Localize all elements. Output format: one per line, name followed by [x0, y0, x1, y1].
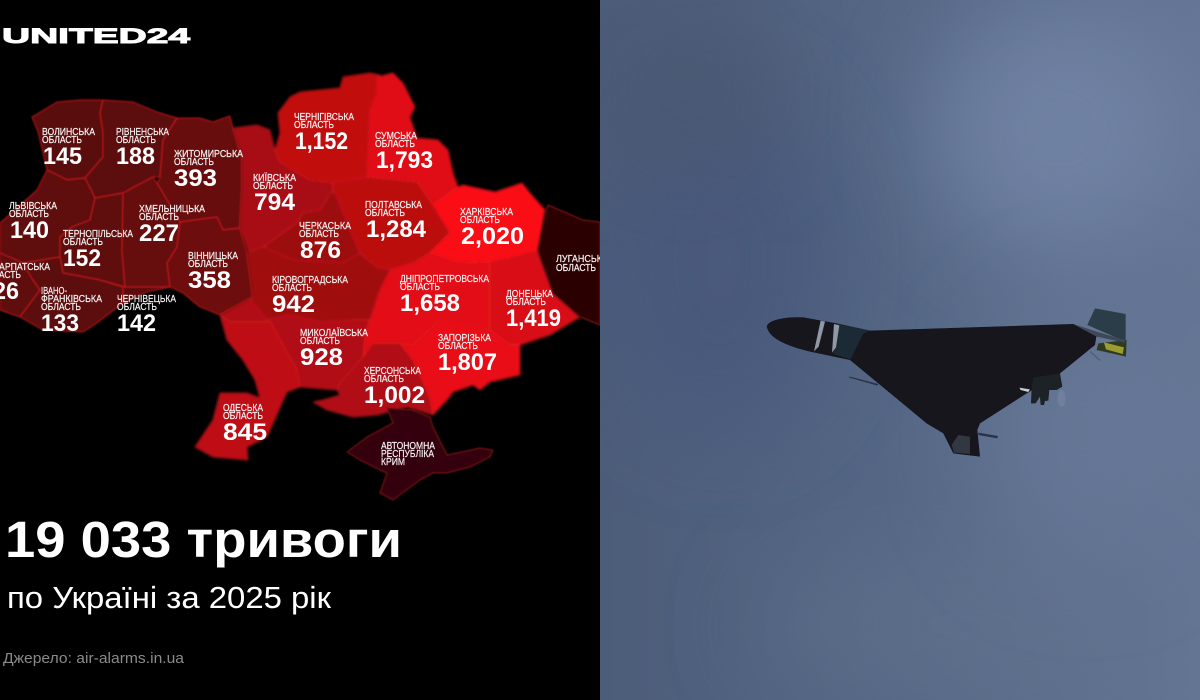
label: Chernihiv: ЧЕРНІГІВСЬКА — [294, 112, 354, 123]
label: Kyiv — [253, 172, 296, 210]
label: Poltava: 1,284 — [366, 216, 427, 243]
label: Mykolaiv — [300, 327, 368, 371]
label: Kharkiv: ОБЛАСТЬ — [460, 215, 500, 226]
label: Odesa: 845 — [223, 419, 267, 446]
subheading: period: по Україні за 2025 рік — [7, 580, 331, 615]
label: Kherson: ОБЛАСТЬ — [364, 374, 404, 385]
label: Ivano-Frankivsk: ІВАНО- — [41, 286, 67, 297]
label: Lviv: ОБЛАСТЬ — [9, 209, 49, 220]
label: Vinnytsia: ВІННИЦЬКА — [188, 251, 238, 262]
label: Crimea: АВТОНОМНА — [381, 441, 435, 452]
region: Chernivtsi — [123, 287, 170, 303]
region: Mykolaiv — [220, 297, 370, 390]
label: Ivano-Frankivsk: 133 — [41, 310, 79, 337]
label: Sumy: ОБЛАСТЬ — [375, 139, 415, 150]
label: Khmelnytskyi: 227 — [139, 220, 179, 247]
region: Kherson — [313, 343, 433, 417]
label: Cherkasy: 876 — [300, 237, 341, 264]
region: Donetsk — [490, 250, 580, 345]
region: Crimea — [347, 408, 493, 500]
region: Zhytomyr — [157, 116, 242, 230]
label: Kyiv: ОБЛАСТЬ — [253, 181, 293, 192]
label: Ternopil: 152 — [63, 245, 101, 272]
label: Mykolaiv: МИКОЛАЇВСЬКА — [300, 327, 368, 339]
label: Zaporizhzhia — [438, 333, 497, 376]
label: Khmelnytskyi: ОБЛАСТЬ — [139, 212, 179, 223]
label: Ivano-Frankivsk — [41, 286, 102, 331]
label: Rivne: 188 — [116, 143, 155, 170]
label: Zhytomyr — [174, 150, 244, 186]
label: Donetsk: ОБЛАСТЬ — [506, 297, 546, 308]
label: Chernihiv: 1,152 — [295, 128, 348, 155]
label: Ivano-Frankivsk: ОБЛАСТЬ — [41, 302, 81, 313]
region: Ternopil — [60, 193, 125, 287]
label: Odesa: ОБЛАСТЬ — [223, 411, 263, 422]
heading: total alarms: 19 033 тривоги — [5, 511, 402, 568]
label: Cherkasy: ЧЕРКАСЬКА — [299, 221, 351, 232]
label: Crimea — [381, 441, 435, 468]
label: Dnipropetrovsk — [400, 274, 489, 317]
label: Ivano-Frankivsk: ФРАНКІВСЬКА — [41, 294, 102, 305]
label: Donetsk: 1,419 — [506, 305, 561, 332]
region: Luhansk — [538, 205, 600, 325]
label: Volyn: 145 — [43, 143, 82, 170]
label: Chernivtsi: 142 — [117, 310, 156, 337]
label: Kherson — [364, 366, 425, 409]
label: Kharkiv: ХАРКІВСЬКА — [460, 207, 513, 218]
region: Cherkasy — [263, 190, 360, 263]
region: Kirovohrad — [247, 247, 390, 322]
label: Ternopil: ОБЛАСТЬ — [63, 237, 103, 248]
label: Volyn — [42, 128, 96, 164]
source note: Джерело: air-alarms.in.ua — [3, 651, 185, 667]
label: Donetsk: ДОНЕЦЬКА — [506, 289, 553, 300]
label: Rivne: РІВНЕНСЬКА — [116, 127, 169, 138]
region: Chernihiv — [275, 73, 380, 183]
icon: drone — [767, 308, 1127, 457]
label: Rivne: ОБЛАСТЬ — [116, 135, 156, 146]
label: Cherkasy: ОБЛАСТЬ — [299, 229, 339, 240]
label: Poltava: ОБЛАСТЬ — [365, 208, 405, 219]
region: Poltava — [333, 177, 450, 270]
label: Zhytomyr: ЖИТОМИРСЬКА — [174, 149, 243, 160]
label: Luhansk: ЛУГАНСЬКА — [556, 254, 608, 265]
label: Ternopil — [63, 230, 133, 266]
label: Kyiv: 794 — [254, 189, 296, 216]
panel: photo of drone in sky — [600, 0, 1200, 700]
region: Volyn — [32, 100, 103, 180]
map of Ukraine: central and eastern regions — [195, 73, 580, 460]
label: Zakarpattia — [0, 262, 50, 299]
label: Donetsk — [506, 289, 561, 332]
label: Kharkiv — [460, 207, 524, 250]
label: Sumy — [375, 131, 433, 174]
label: Chernihiv: ОБЛАСТЬ — [294, 120, 334, 131]
logo: UNITED24: UNITED24 — [2, 25, 191, 48]
label: Lviv: 140 — [10, 217, 49, 244]
label: Crimea: РЕСПУБЛІКА — [381, 449, 434, 460]
label: Crimea: КРИМ — [381, 457, 405, 468]
label: Kirovohrad: ОБЛАСТЬ — [272, 283, 312, 294]
region: Sumy — [367, 73, 458, 205]
label: Zhytomyr: ОБЛАСТЬ — [174, 157, 214, 168]
label: Chernivtsi: ОБЛАСТЬ — [117, 302, 157, 313]
label: Volyn: ОБЛАСТЬ — [42, 135, 82, 146]
label: Kherson: 1,002 — [364, 382, 425, 409]
label: Chernivtsi: ЧЕРНІВЕЦЬКА — [117, 294, 176, 305]
label: Odesa: ОДЕСЬКА — [223, 403, 263, 414]
region: Odesa — [195, 315, 300, 460]
label: Zhytomyr: 393 — [174, 165, 217, 192]
label: Dnipropetrovsk: ОБЛАСТЬ — [400, 282, 440, 293]
label: Cherkasy — [299, 221, 351, 264]
label: Khmelnytskyi: ХМЕЛЬНИЦЬКА — [139, 204, 205, 215]
label: Kirovohrad: КІРОВОГРАДСЬКА — [272, 275, 348, 286]
region: Lviv — [0, 170, 95, 263]
panel: alarm map — [0, 28, 600, 666]
map of Ukraine: occupied regions — [347, 205, 600, 500]
label: Khmelnytskyi — [139, 204, 205, 241]
label: Lviv — [8, 202, 58, 238]
region: Kharkiv — [430, 183, 545, 263]
label: Odesa — [223, 403, 267, 446]
region: Zakarpattia — [0, 253, 40, 317]
label: Sumy: 1,793 — [376, 147, 433, 174]
label: Chernihiv — [294, 112, 354, 155]
label: Kherson: ХЕРСОНСЬКА — [364, 366, 421, 377]
label: Poltava — [365, 200, 427, 243]
region: Kyiv — [233, 125, 333, 252]
label: Mykolaiv: ОБЛАСТЬ — [300, 336, 340, 347]
label: Zaporizhzhia: ЗАПОРІЗЬКА — [438, 333, 491, 344]
map of Ukraine: western regions — [0, 100, 253, 332]
label: Kirovohrad — [272, 275, 348, 318]
region: Vinnytsia — [167, 217, 253, 315]
label: Poltava: ПОЛТАВСЬКА — [365, 200, 422, 211]
label: Kirovohrad: 942 — [272, 291, 315, 318]
label: Luhansk — [556, 254, 608, 274]
label: Rivne — [116, 128, 169, 164]
region: Ivano-Frankivsk — [20, 257, 123, 332]
label: Chernivtsi — [117, 294, 176, 337]
region: Zaporizhzhia — [400, 320, 520, 415]
region: Rivne — [85, 100, 177, 198]
label: Lviv: ЛЬВІВСЬКА — [9, 201, 57, 212]
label: Ternopil: ТЕРНОПІЛЬСЬКА — [63, 229, 133, 240]
region: Dnipropetrovsk — [363, 253, 490, 357]
label: Zaporizhzhia: 1,807 — [438, 349, 497, 376]
label: Vinnytsia: 358 — [188, 267, 231, 294]
label: Vinnytsia — [188, 252, 238, 288]
label: Sumy: СУМСЬКА — [375, 131, 417, 142]
label: Kyiv: КИЇВСЬКА — [253, 172, 296, 184]
label: Zaporizhzhia: ОБЛАСТЬ — [438, 341, 478, 352]
label: Luhansk: ОБЛАСТЬ — [556, 263, 596, 274]
label: Dnipropetrovsk: ДНІПРОПЕТРОВСЬКА — [400, 274, 489, 285]
label: Dnipropetrovsk: 1,658 — [400, 290, 460, 317]
region: Khmelnytskyi — [122, 177, 180, 287]
label: Vinnytsia: ОБЛАСТЬ — [188, 259, 228, 270]
label: Volyn: ВОЛИНСЬКА — [42, 127, 95, 138]
label: Kharkiv: 2,020 — [461, 223, 524, 250]
label: Mykolaiv: 928 — [300, 344, 343, 371]
